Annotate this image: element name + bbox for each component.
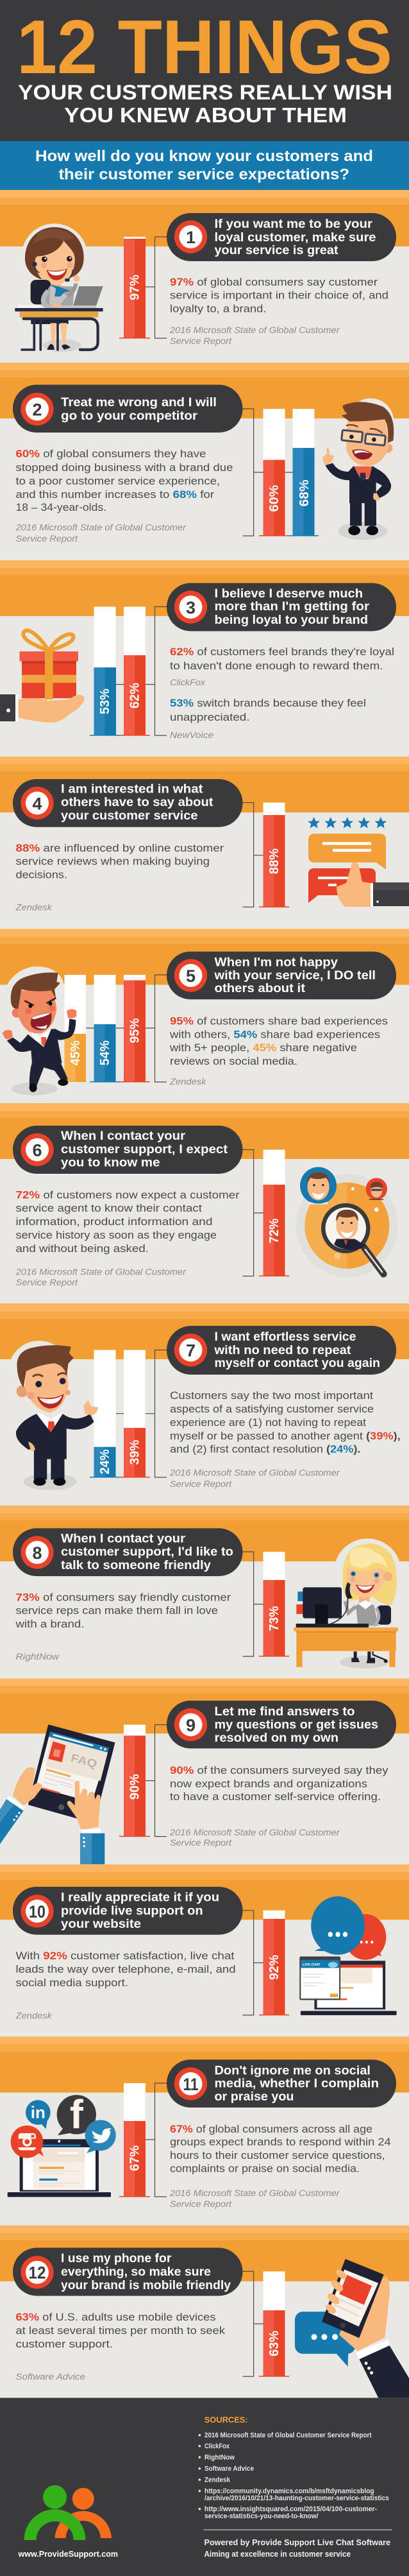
- heading 12: [13, 2247, 242, 2296]
- heading 11: or praise you: [214, 2090, 294, 2104]
- body text 4: service reviews when making buying: [15, 856, 210, 868]
- bar chart: 67%: [119, 2083, 167, 2197]
- body text 2: 18 – 34-year-olds.: [15, 502, 106, 513]
- bar chart: 63%: 63%: [267, 2330, 281, 2357]
- heading 11: 11: [183, 2075, 199, 2094]
- panel: item 3: [0, 560, 409, 740]
- body text 12: 63% of U.S. adults use mobile devices: [15, 2312, 215, 2323]
- body text 11: 67% of global consumers across all age: [170, 2124, 372, 2135]
- sources heading: SOURCES:: [204, 2415, 248, 2425]
- heading 6: When I contact your: [61, 1129, 185, 1143]
- heading 5: When I'm not happy: [214, 955, 338, 969]
- sources list: ClickFox: [204, 2443, 230, 2450]
- body text 12: customer support.: [15, 2339, 113, 2350]
- heading 5: with your service, I DO tell: [213, 968, 376, 983]
- body text 3b: 53% switch brands because they feel: [170, 698, 366, 709]
- heading 9: 9: [186, 1716, 196, 1735]
- heading 3: [167, 583, 396, 631]
- heading 12: 12: [28, 2263, 46, 2283]
- bar chart: 53% and 62%: 53%: [98, 689, 112, 714]
- bar chart: 60% and 68%: 68%: [297, 479, 312, 506]
- body text 1: loyalty to, a brand.: [170, 304, 267, 315]
- heading 7: with no need to repeat: [213, 1343, 351, 1357]
- illustration: five stars, review bubbles, thumbs up: [308, 817, 409, 907]
- panel: intro question: [0, 141, 409, 190]
- bar chart: 67%: 67%: [128, 2145, 142, 2171]
- heading 10: [13, 1887, 242, 1935]
- heading 6: customer support, I expect: [61, 1142, 228, 1156]
- body text 6: information, product information and: [15, 1216, 213, 1228]
- bar chart: 45%, 54% and 95%: 95%: [128, 1018, 142, 1043]
- subtitle: [18, 81, 392, 127]
- logo: Provide Support: [24, 2485, 112, 2540]
- heading 1: [167, 213, 396, 261]
- body text 6: 72% of customers now expect a customer: [15, 1189, 240, 1201]
- panel: item 10: [0, 1864, 409, 2020]
- bar chart: 45%, 54% and 95%: [64, 975, 167, 1082]
- bar chart: 90%: [119, 1725, 167, 1837]
- heading 11: [167, 2059, 396, 2108]
- source 7: 2016 Microsoft State of Global Customer: [169, 1468, 340, 1478]
- body text 7: [170, 1390, 401, 1455]
- source 11: [169, 2188, 340, 2209]
- panel: item 1: [0, 190, 409, 352]
- source 3a: ClickFox: [170, 678, 206, 687]
- body text 7: and (2) first contact resolution (24%).: [170, 1444, 360, 1455]
- heading 5: 5: [186, 966, 196, 986]
- heading 2: Treat me wrong and I will: [61, 395, 217, 409]
- heading 11: media, whether I complain: [214, 2077, 379, 2091]
- powered by text: Powered by Provide Support Live Chat Software: [204, 2537, 390, 2547]
- heading 6: you to know me: [61, 1156, 160, 1170]
- heading 3: more than I'm getting for: [214, 599, 369, 614]
- heading 6: [13, 1126, 242, 1174]
- body text 2: stopped doing business with a brand due: [15, 462, 233, 474]
- powered by text: Aiming at excellence in customer service: [204, 2549, 351, 2559]
- body text 7: experience are (1) not having to repeat: [170, 1417, 366, 1429]
- source 12: Software Advice: [15, 2372, 85, 2382]
- source 2: 2016 Microsoft State of Global Customer: [15, 522, 187, 533]
- source 1: 2016 Microsoft State of Global Customer: [169, 325, 340, 335]
- heading 8: [13, 1528, 242, 1576]
- sources list: service-statistics-you-need-to-know/: [204, 2512, 318, 2520]
- body text 5: with others, 54% share bad experiences: [169, 1029, 380, 1040]
- heading 9: [167, 1701, 396, 1748]
- body text 2: to a poor customer service experience,: [15, 476, 220, 487]
- bar chart: 24% and 39%: 24%: [98, 1449, 112, 1474]
- body text 5: reviews on social media.: [170, 1056, 297, 1067]
- bar chart: 24% and 39%: 39%: [128, 1439, 142, 1464]
- source 9: 2016 Microsoft State of Global Customer: [169, 1828, 340, 1837]
- sources list: https://community.dynamics.com/b/msftdynamicsblog: [204, 2487, 374, 2495]
- body text 10: leads the way over telephone, e-mail, and: [15, 1964, 236, 1975]
- bar chart: 72%: 72%: [267, 1218, 281, 1244]
- source 2: [15, 522, 187, 544]
- body text 5: 95% of customers share bad experiences: [170, 1016, 388, 1027]
- source 9: [169, 1828, 340, 1848]
- heading 10: I really appreciate it if you: [61, 1891, 219, 1905]
- heading 1: If you want me to be your: [214, 217, 372, 231]
- body text 9: [170, 1765, 388, 1803]
- bar chart: 97%: [119, 237, 167, 339]
- heading 9: my questions or get issues: [214, 1718, 378, 1732]
- illustration: chat bubbles and live chat screen: LIVE CHAT: [303, 1963, 321, 1967]
- heading 10: 10: [29, 1902, 46, 1921]
- title: 12 THINGS: [17, 4, 392, 90]
- heading 12: everything, so make sure: [61, 2265, 211, 2279]
- body text 11: hours to their customer service questions,: [170, 2150, 385, 2161]
- heading 12: I use my phone for: [61, 2251, 172, 2265]
- panel: item 9: [0, 1679, 409, 1864]
- source 7: Service Report: [170, 1479, 232, 1489]
- bar chart: 73%: [242, 1552, 289, 1657]
- body text 12: at least several times per month to seek: [15, 2325, 226, 2337]
- bar chart: 88%: 88%: [267, 848, 281, 874]
- panel: item 6: [0, 1103, 409, 1287]
- panel: footer: [0, 2398, 409, 2576]
- source 8: RightNow: [15, 1652, 60, 1662]
- panel: item 11: [0, 2037, 409, 2209]
- sources list: Zendesk: [204, 2476, 231, 2484]
- heading 10: provide live support on: [61, 1903, 203, 1918]
- illustration: hands holding FAQ tablet: [0, 1725, 114, 1864]
- heading 1: loyal customer, make sure: [214, 230, 376, 245]
- bar chart: 60% and 68%: [242, 409, 319, 537]
- bar chart: 88%: [242, 803, 289, 907]
- panel: item 7: [0, 1303, 409, 1490]
- illustration: gift on a hand: [0, 630, 85, 723]
- body text 10: [15, 1950, 236, 1989]
- illustration: smiling man thumbs up: [8, 1341, 98, 1490]
- source 1: Service Report: [170, 336, 232, 346]
- source 11: Service Report: [170, 2199, 232, 2209]
- heading 7: I want effortless service: [214, 1330, 356, 1344]
- heading 3: I believe I deserve much: [214, 587, 363, 601]
- heading 5: others about it: [214, 981, 306, 995]
- panel: intro question: their customer service expectations?: [59, 166, 349, 184]
- heading 2: go to your competitor: [61, 409, 197, 423]
- body text 11: groups expect brands to respond within 24: [170, 2136, 391, 2148]
- body text 6: service history as soon as they engage: [15, 1230, 217, 1241]
- website url: www.ProvideSupport.com: [18, 2549, 118, 2559]
- bar chart: 60% and 68%: 60%: [267, 485, 281, 512]
- bar chart: 53% and 62%: 62%: [128, 683, 142, 708]
- body text 8: 73% of consumers say friendly customer: [15, 1592, 231, 1604]
- heading 12: your brand is mobile friendly: [61, 2278, 231, 2292]
- source 2: Service Report: [15, 534, 78, 544]
- heading 4: your customer service: [61, 809, 198, 823]
- heading 10: your website: [61, 1917, 141, 1931]
- bar chart: 92%: [242, 1911, 289, 2015]
- heading 8: When I contact your: [61, 1531, 185, 1545]
- heading 3: being loyal to your brand: [214, 613, 368, 627]
- panel: intro question: How well do you know your customers and: [35, 148, 373, 165]
- body text 3a: 62% of customers feel brands they're loyal: [170, 646, 394, 658]
- sources list: [199, 2432, 389, 2520]
- panel: title header: [0, 0, 409, 141]
- body text 3b: [170, 698, 366, 723]
- panel: item 8: [0, 1506, 409, 1669]
- body text 5: [169, 1016, 388, 1067]
- bar chart: 92%: 92%: [267, 1955, 281, 1980]
- sources list: http://www.insightsquared.com/2015/04/100-customer-: [204, 2505, 377, 2513]
- heading 4: I am interested in what: [61, 782, 203, 796]
- bar chart: 90%: 90%: [128, 1774, 142, 1799]
- heading 4: [13, 779, 242, 827]
- body text 9: 90% of the consumers surveyed say they: [170, 1765, 388, 1776]
- sources list: /archive/2016/10/21/13-haunting-customer-service-statistics: [204, 2494, 389, 2502]
- heading 9: resolved on my own: [214, 1731, 338, 1745]
- body text 6: and without being asked.: [15, 1243, 149, 1255]
- body text 7: myself or be passed to another agent (39%),: [170, 1430, 401, 1442]
- subtitle: YOU KNEW ABOUT THEM: [64, 104, 347, 127]
- heading 6: 6: [32, 1141, 42, 1160]
- bar chart: 97%: 97%: [128, 275, 142, 300]
- source 10: Zendesk: [15, 2011, 53, 2020]
- source 5: Zendesk: [169, 1077, 207, 1086]
- heading 1: your service is great: [214, 243, 338, 257]
- body text 7: Customers say the two most important: [170, 1390, 373, 1402]
- body text 1: [170, 277, 388, 315]
- body text 3a: to haven't done enough to reward them.: [170, 660, 383, 672]
- bar chart: 45%, 54% and 95%: 45%: [69, 1040, 83, 1065]
- illustration: social media bubbles and laptop: [8, 2093, 116, 2197]
- illustration: angry man: [2, 966, 76, 1095]
- heading 9: Let me find answers to: [214, 1704, 355, 1719]
- body text 1: 97% of global consumers say customer: [170, 277, 378, 288]
- body text 8: with a brand.: [15, 1619, 85, 1630]
- body text 1: service is important in their choice of, and: [170, 290, 388, 302]
- heading 7: [167, 1326, 396, 1375]
- body text 10: social media support.: [15, 1977, 128, 1989]
- bar chart: 63%: [242, 2271, 289, 2377]
- body text 6: [15, 1189, 240, 1255]
- bar chart: 45%, 54% and 95%: 54%: [98, 1040, 112, 1065]
- body text 8: [15, 1592, 231, 1630]
- illustration: chat bubbles and live chat screen: [299, 1896, 397, 2015]
- body text 2: [15, 448, 233, 513]
- source 7: [169, 1468, 340, 1489]
- sources list: RightNow: [204, 2454, 235, 2462]
- illustration: support agent at desk: [15, 223, 103, 352]
- body text 3a: [170, 646, 394, 672]
- bar chart: 72%: [242, 1150, 289, 1276]
- bar chart: 53% and 62%: [90, 606, 167, 735]
- body text 4: 88% are influenced by online customer: [15, 843, 224, 854]
- heading 8: talk to someone friendly: [61, 1558, 211, 1572]
- illustration: social media bubbles and laptop: f: [70, 2093, 84, 2138]
- heading 8: 8: [32, 1543, 42, 1563]
- illustration: blonde agent on phone at desk: [294, 1538, 401, 1669]
- body text 2: 60% of global consumers they have: [15, 448, 206, 459]
- heading 4: 4: [32, 794, 42, 813]
- source 3b: NewVoice: [170, 730, 213, 740]
- illustration: social media bubbles and laptop: in: [31, 2103, 46, 2122]
- panel: item 12: [0, 2226, 409, 2398]
- illustration: hands holding FAQ tablet: FAQ: [69, 1751, 99, 1771]
- sources list: 2016 Microsoft State of Global Customer Service Report: [204, 2432, 372, 2439]
- heading 2: [13, 385, 242, 433]
- powered by text: [204, 2537, 390, 2559]
- bar chart: 24% and 39%: [90, 1350, 167, 1477]
- body text 8: service reps can make them fall in love: [15, 1605, 218, 1617]
- body text 5: with 5+ people, 45% share negative: [169, 1042, 357, 1054]
- source 9: Service Report: [170, 1838, 232, 1848]
- illustration: hand holding phone with chat bubble: [295, 2260, 409, 2398]
- body text 7: aspects of a satisfying customer service: [170, 1404, 374, 1415]
- heading 1: 1: [186, 228, 196, 247]
- heading 3: 3: [186, 598, 196, 617]
- body text 11: complaints or praise on social media.: [170, 2163, 360, 2175]
- source 6: 2016 Microsoft State of Global Customer: [15, 1267, 187, 1276]
- panel: item 5: [0, 929, 409, 1095]
- illustration: upset man with glasses: [322, 399, 394, 540]
- heading 8: customer support, I'd like to: [61, 1545, 233, 1559]
- body text 10: With 92% customer satisfaction, live chat: [15, 1950, 235, 1962]
- bar chart: 73%: 73%: [267, 1606, 281, 1631]
- body text 12: [15, 2312, 226, 2350]
- panel: item 2: [0, 363, 409, 544]
- heading 11: Don't ignore me on social: [214, 2064, 371, 2078]
- body text 2: and this number increases to 68% for: [15, 489, 215, 501]
- body text 9: to have a customer self-service offering.: [170, 1791, 381, 1803]
- source 4: Zendesk: [15, 902, 53, 912]
- source 11: 2016 Microsoft State of Global Customer: [169, 2188, 340, 2198]
- body text 3b: unappreciated.: [170, 712, 250, 723]
- body text 6: service agent to know their contact: [15, 1203, 202, 1214]
- illustration: magnifier over customer faces: [296, 1167, 398, 1278]
- heading 7: 7: [186, 1341, 196, 1361]
- subtitle: YOUR CUSTOMERS REALLY WISH: [18, 81, 392, 104]
- source 1: [169, 325, 340, 346]
- body text 4: decisions.: [15, 870, 67, 881]
- heading 5: [167, 952, 396, 999]
- heading 2: 2: [32, 400, 42, 420]
- heading 4: others have to say about: [61, 795, 213, 809]
- source 6: [15, 1267, 187, 1287]
- body text 4: [15, 843, 224, 881]
- panel: item 4: [0, 757, 409, 912]
- source 6: Service Report: [15, 1278, 78, 1287]
- sources list: Software Advice: [204, 2465, 254, 2473]
- heading 7: myself or contact you again: [214, 1356, 380, 1370]
- body text 9: now expect brands and organizations: [170, 1778, 367, 1790]
- body text 11: [170, 2124, 391, 2175]
